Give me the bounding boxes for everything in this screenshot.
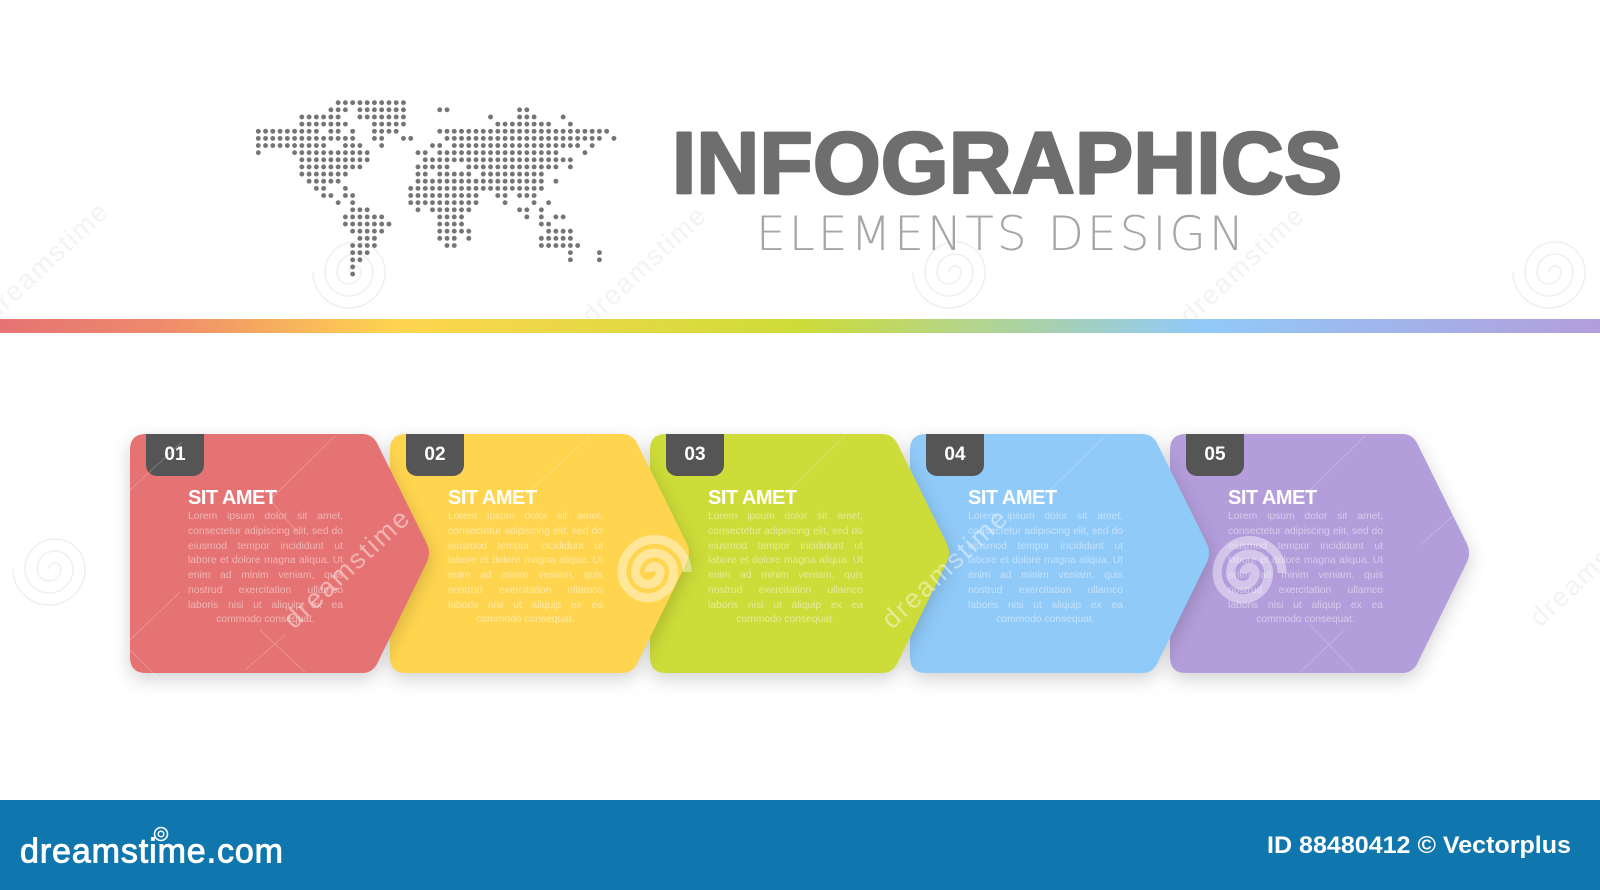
text block 02: [448, 511, 603, 625]
badge 03: [666, 434, 724, 476]
text block 05: labore et dolore magna aliqua. Ut: [1228, 555, 1383, 566]
text block 02: Lorem ipsum dolor sit amet,: [448, 511, 603, 522]
text block 03: enim ad minim veniam, quis: [708, 570, 863, 581]
badge 01: [146, 434, 204, 476]
text block 04: labore et dolore magna aliqua. Ut: [968, 555, 1123, 566]
arrow shape 04: [902, 432, 1215, 687]
arrow shape 05: [1162, 432, 1476, 687]
text block 05: consectetur adipiscing elit, sed do: [1228, 526, 1383, 537]
text block 03: labore et dolore magna aliqua. Ut: [708, 555, 863, 566]
text block 04: laboris nisi ut aliquip ex ea: [968, 600, 1123, 610]
text block 05: [1228, 511, 1383, 625]
text block 03: Lorem ipsum dolor sit amet,: [708, 511, 863, 522]
footer logo: dreamstime.com: [20, 832, 283, 870]
text block 01: Lorem ipsum dolor sit amet,: [188, 511, 343, 522]
text block 04: enim ad minim veniam, quis: [968, 570, 1123, 581]
text block 01: labore et dolore magna aliqua. Ut: [188, 555, 343, 566]
panel: step 05: [1162, 432, 1476, 687]
arrow shape 01: [122, 432, 436, 687]
text block 05: Lorem ipsum dolor sit amet,: [1228, 511, 1383, 522]
badge 04: [926, 434, 984, 476]
text block 05: laboris nisi ut aliquip ex ea: [1228, 600, 1383, 610]
text block 03: nostrud exercitation ullamco: [708, 585, 863, 596]
heading 05: SIT AMET: [1228, 487, 1317, 509]
panel: step 01: [122, 432, 436, 687]
panel: step 02: [382, 432, 695, 687]
rainbow divider bar: [0, 319, 1600, 333]
text block 01: nostrud exercitation ullamco: [188, 585, 343, 596]
text block 02: enim ad minim veniam, quis: [448, 570, 603, 581]
foreground watermark over cards: dreamstime: [876, 503, 1013, 634]
text block 01: enim ad minim veniam, quis: [188, 570, 343, 581]
text block 04: [968, 511, 1123, 625]
text block 03: [708, 511, 863, 625]
foreground watermark over cards: dreamstime: [278, 503, 415, 634]
panel: step 04: [902, 432, 1215, 687]
text block 04: consectetur adipiscing elit, sed do: [968, 526, 1123, 537]
text block 05: commodo consequat.: [1256, 614, 1355, 625]
heading 03: SIT AMET: [708, 487, 797, 509]
text block 03: consectetur adipiscing elit, sed do: [708, 526, 863, 537]
heading 02: SIT AMET: [448, 487, 537, 509]
panel: step 03: [642, 432, 956, 687]
text block 05: eiusmod tempor incididunt ut: [1228, 540, 1383, 552]
text block 05: enim ad minim veniam, quis: [1228, 570, 1383, 581]
text block 04: nostrud exercitation ullamco: [968, 585, 1123, 596]
text block 02: eiusmod tempor incididunt ut: [448, 540, 603, 552]
arrow shape 03: [642, 432, 956, 687]
badge 03: 03: [684, 444, 706, 465]
text block 03: laboris nisi ut aliquip ex ea: [708, 600, 863, 610]
text block 02: laboris nisi ut aliquip ex ea: [448, 600, 603, 610]
title: INFOGRAPHICS: [672, 115, 1342, 210]
background watermark: spirals and wordmarks: dreamstime: [576, 201, 712, 330]
text block 02: consectetur adipiscing elit, sed do: [448, 526, 603, 537]
text block 03: eiusmod tempor incididunt ut: [708, 540, 863, 552]
arrow shape 02: [382, 432, 695, 687]
background watermark: spirals and wordmarks: dreamstime: [1174, 201, 1310, 330]
badge 04: 04: [944, 444, 966, 465]
text block 01: laboris nisi ut aliquip ex ea: [188, 600, 343, 610]
text block 02: labore et dolore magna aliqua. Ut: [448, 555, 603, 566]
badge 05: [1186, 434, 1244, 476]
text block 02: commodo consequat.: [476, 614, 575, 625]
heading 01: SIT AMET: [188, 487, 277, 509]
text block 04: eiusmod tempor incididunt ut: [968, 540, 1123, 552]
footer credit: ID 88480412 © Vectorplus: [1267, 832, 1571, 859]
badge 05: 05: [1204, 444, 1226, 465]
badge 01: 01: [164, 444, 186, 465]
text block 01: commodo consequat.: [216, 614, 315, 625]
text block 01: consectetur adipiscing elit, sed do: [188, 526, 343, 537]
badge 02: [406, 434, 464, 476]
icon: dotted world map: [256, 100, 616, 276]
footer band: [0, 800, 1600, 890]
heading 04: SIT AMET: [968, 487, 1057, 509]
text block 04: commodo consequat.: [996, 614, 1095, 625]
badge 02: 02: [424, 444, 446, 465]
text block 05: nostrud exercitation ullamco: [1228, 585, 1383, 596]
text block 02: nostrud exercitation ullamco: [448, 585, 603, 596]
text block 04: Lorem ipsum dolor sit amet,: [968, 511, 1123, 522]
text block 01: [188, 511, 343, 625]
text block 01: eiusmod tempor incididunt ut: [188, 540, 343, 552]
text block 03: commodo consequat.: [736, 614, 835, 625]
